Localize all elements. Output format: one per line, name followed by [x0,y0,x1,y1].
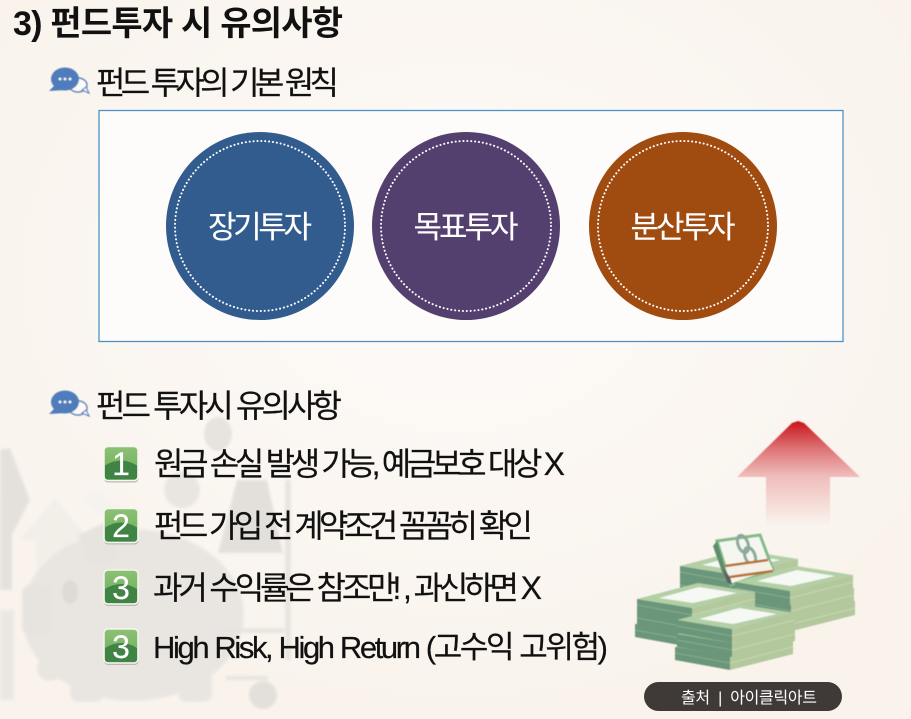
item 3: 과거 수익률은 참조만! , 과신하면 X [153,570,542,606]
panel: three principles [99,110,843,342]
title: 3) 펀드투자 시 유의사항 [13,5,343,43]
item 1: 원금 손실 발생 가능, 예금보호 대상 X [154,446,565,482]
item 3: 3 [112,570,130,606]
item 4: 3 [112,629,130,665]
item 1: 1 [112,446,130,482]
item 4: High Risk, High Return (고수익 고위험) [153,630,608,665]
heading: investment cautions: 펀드 투자시 유의사항 [96,388,342,424]
item 2: 2 [112,508,130,544]
source label pill [644,682,842,711]
single upright banknote bundle [713,534,773,585]
arrow: rising red [737,421,860,525]
circle: long-term investment [166,132,354,320]
circle: diversified investment [589,132,777,320]
circle: goal investment: 목표투자 [414,210,518,245]
background illustration: piggy bank and investors [0,417,291,709]
illustration: stacks of money [635,534,855,670]
circle: long-term investment: 장기투자 [208,210,312,245]
source label pill: 출처 | 아이클릭아트 [681,689,817,707]
item 2: 펀드 가입 전 계약조건 꼼꼼히 확인 [154,508,533,544]
icon: speech bubbles [49,68,89,93]
heading: basic principles: 펀드 투자의 기본 원칙 [96,65,339,101]
icon: speech bubbles [49,390,89,416]
circle: diversified investment: 분산투자 [630,210,736,245]
circle: goal investment [372,132,560,320]
caution list [104,446,608,665]
